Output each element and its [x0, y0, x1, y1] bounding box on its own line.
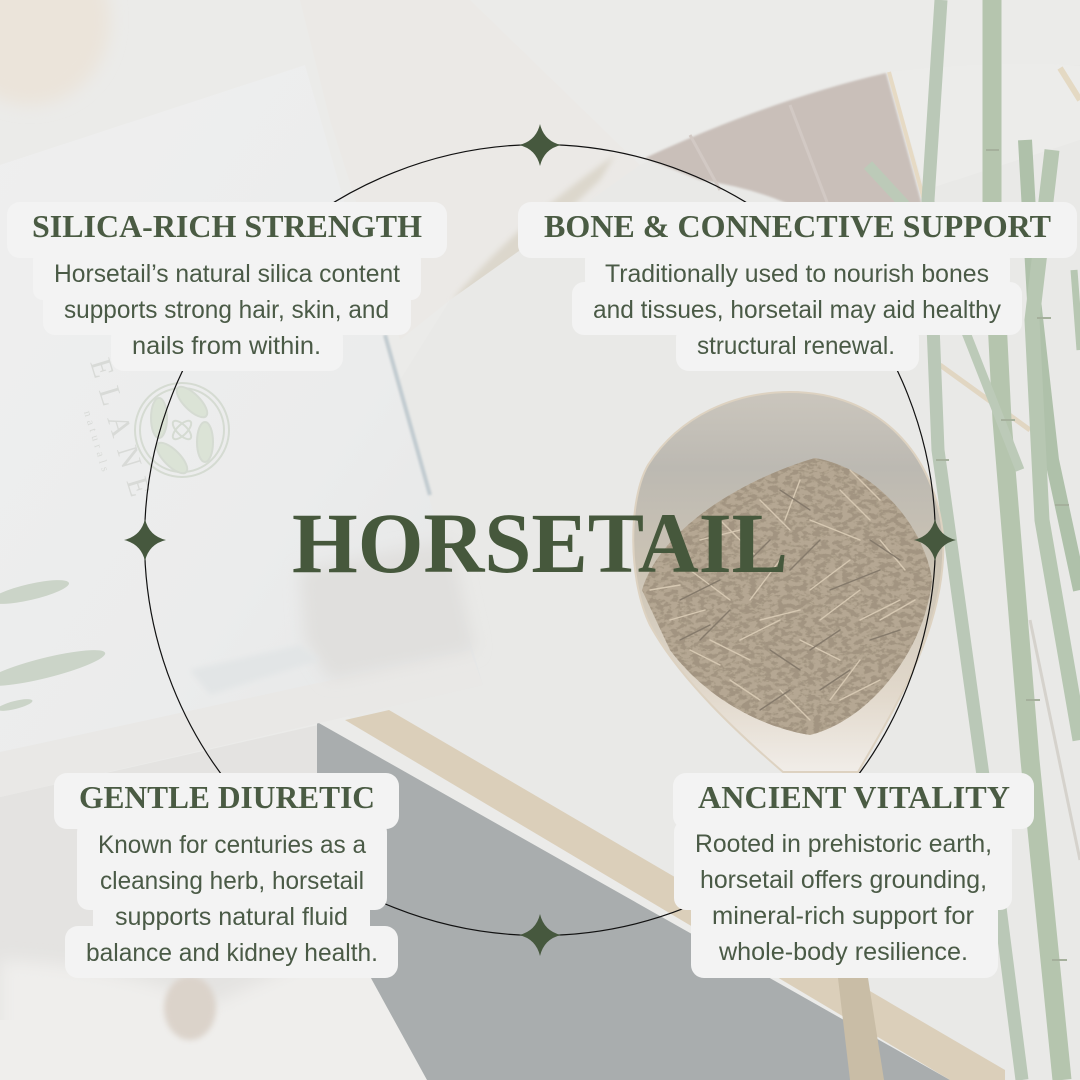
panel: bone and connective support [518, 202, 1077, 371]
text block: bone and connective support: and tissues, horsetail may aid healthy [593, 296, 1001, 324]
icon: four-point star top [519, 124, 561, 166]
panel: silica-rich strength [7, 202, 447, 371]
text block: bone and connective support [593, 260, 1001, 360]
text block: silica-rich strength: Horsetail’s natural silica content [54, 260, 400, 288]
background: white saucer and cup [0, 725, 427, 1080]
background: pale stone sheet and spilled herbs [300, 0, 640, 340]
heading: silica-rich strength: SILICA-RICH STRENGTH [32, 208, 422, 244]
panel: gentle diuretic [54, 773, 399, 978]
text block: gentle diuretic [86, 831, 378, 967]
text block: bone and connective support: Traditionally used to nourish bones [605, 260, 989, 288]
icon: four-point star bottom [519, 914, 561, 956]
text block: ancient vitality: Rooted in prehistoric earth, [695, 830, 992, 858]
text block: ancient vitality: mineral-rich support for [712, 902, 974, 930]
text block: silica-rich strength: nails from within. [132, 332, 321, 360]
text block: bone and connective support: structural renewal. [697, 332, 895, 360]
background: pouch logo [135, 382, 229, 478]
text block: gentle diuretic: cleansing herb, horsetail [100, 867, 364, 895]
background: sprigs on pouch [0, 575, 108, 713]
background: dried herbs in spoon [642, 458, 932, 735]
text block: gentle diuretic: supports natural fluid [115, 903, 348, 931]
background: pouch brand text: ELANE [83, 354, 160, 511]
title: HORSETAIL [292, 495, 788, 591]
text block: ancient vitality: horsetail offers grounding, [700, 866, 987, 894]
background: gold spoon [633, 392, 943, 772]
background: horsetail stems [868, 0, 1080, 1080]
background: pouch brand text: naturals [81, 409, 112, 477]
panel: ancient vitality [673, 773, 1034, 978]
background: gold board edge [345, 710, 1005, 1080]
background: dark slate slab [317, 722, 950, 1080]
text block: gentle diuretic: Known for centuries as a [98, 831, 366, 859]
text block: silica-rich strength [54, 260, 400, 360]
text block: ancient vitality [695, 830, 992, 966]
text block: ancient vitality: whole-body resilience. [718, 938, 968, 966]
text block: silica-rich strength: supports strong hair, skin, and [64, 296, 389, 324]
background: brown marble corner [645, 73, 922, 220]
heading: gentle diuretic: GENTLE DIURETIC [79, 779, 375, 815]
heading: ancient vitality: ANCIENT VITALITY [698, 779, 1010, 815]
heading: bone and connective support: BONE & CONNECTIVE SUPPORT [544, 208, 1051, 244]
decorative circle ring [144, 144, 936, 936]
text block: gentle diuretic: balance and kidney health. [86, 939, 378, 967]
background: marble board [345, 65, 1080, 1080]
icon: four-point star right [914, 519, 956, 561]
icon: four-point star left [124, 519, 166, 561]
background: foil pouch [0, 65, 483, 797]
